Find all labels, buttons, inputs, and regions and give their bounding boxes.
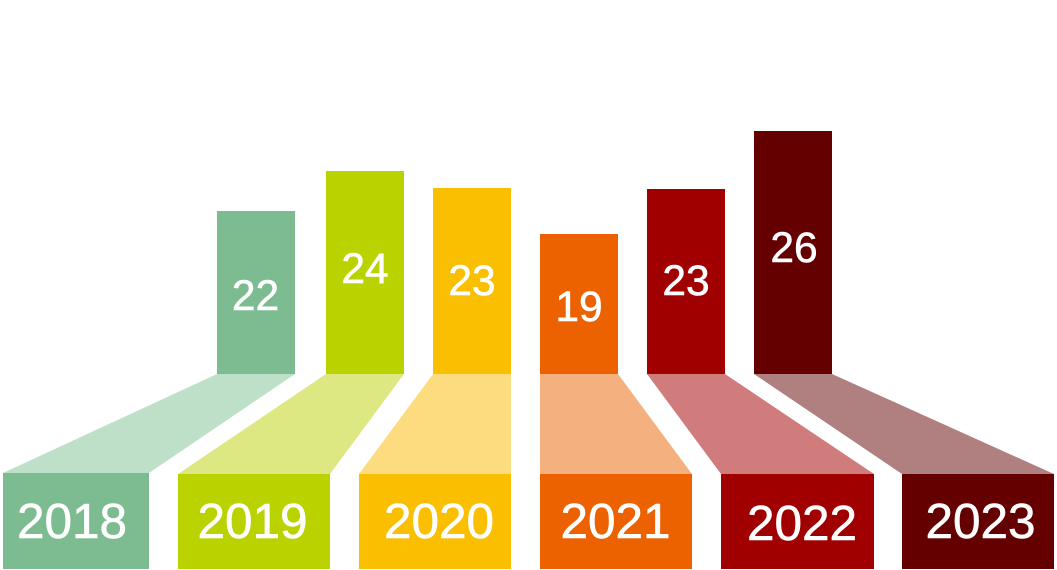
connector 2020 [359,374,511,474]
year box 2020 [359,474,511,569]
connector 2019 [178,374,404,474]
bar 2019 [326,171,404,374]
value 23: 23 [448,258,496,305]
column: 2019 [178,171,404,569]
year label 2019: 2019 [197,494,308,549]
connector 2023 [754,374,1054,474]
year box 2018 [3,473,149,569]
bar 2021 [540,234,618,374]
value 26: 26 [770,225,818,272]
year label 2018: 2018 [17,494,127,549]
bar 2023 [754,131,832,374]
year label 2021: 2021 [560,494,671,549]
column: 2022 [647,189,874,569]
column: 2020 [359,188,511,569]
column: 2021 [540,234,692,569]
connector 2021 [540,374,692,474]
value 19: 19 [555,284,603,331]
year box 2022 [721,474,874,569]
connector 2022 [647,374,874,474]
bar 2020 [433,188,511,374]
connector 2018 [3,374,295,473]
bar 2018 [217,211,295,374]
year box 2023 [902,474,1054,569]
bar 2022 [647,189,725,374]
year box 2021 [540,474,692,569]
value 23: 23 [662,258,710,305]
column: 2023 [754,131,1054,569]
value 24: 24 [341,246,389,293]
year label 2020: 2020 [384,494,494,549]
column: 2018 [3,211,295,569]
year label 2022: 2022 [747,496,857,551]
year box 2019 [178,474,330,569]
year label 2023: 2023 [925,494,1036,549]
value 22: 22 [232,273,279,320]
